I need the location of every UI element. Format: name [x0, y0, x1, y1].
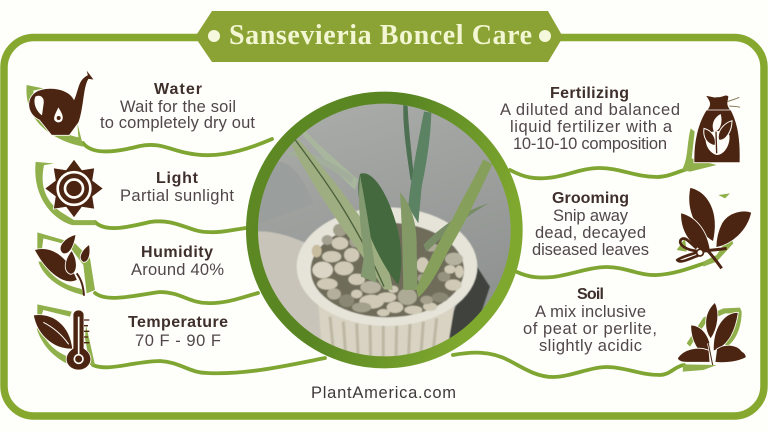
- gravel stones: [312, 224, 464, 316]
- text: fertilizing: Fertilizing: [550, 85, 629, 102]
- text: fertilizing: A diluted and balanced: [500, 101, 680, 119]
- icon: grooming leaves and scissors: [677, 187, 752, 268]
- text: water: Water: [154, 81, 202, 98]
- icon: temperature leaf and thermometer: [33, 304, 95, 370]
- text: soil: [523, 286, 657, 355]
- text: fertilizing: [500, 85, 680, 153]
- title banner: [195, 11, 563, 62]
- text: temperature: 70 F - 90 F: [135, 332, 221, 350]
- text: soil: of peat or perlite,: [523, 320, 657, 338]
- text: grooming: [532, 190, 649, 259]
- text: grooming: diseased leaves: [532, 241, 649, 259]
- connector curves: [83, 139, 705, 377]
- text: temperature: Temperature: [128, 314, 228, 331]
- icon: sun: [35, 159, 103, 225]
- text: soil: Soil: [577, 286, 604, 303]
- text: temperature: [128, 314, 228, 350]
- text: water: [100, 81, 255, 132]
- text: water: to completely dry out: [100, 114, 255, 132]
- icon: soil and sprout: [677, 302, 746, 372]
- icon: fertilizer sack: [682, 95, 740, 172]
- icon: watering can: [26, 69, 94, 147]
- text: water: Wait for the soil: [120, 98, 236, 116]
- text: grooming: dead, decayed: [535, 224, 646, 242]
- text: soil: A mix inclusive: [535, 303, 646, 321]
- photo: potted sansevieria in circle: [252, 98, 520, 367]
- text: humidity: Humidity: [141, 244, 213, 261]
- text: humidity: Around 40%: [131, 261, 224, 279]
- leaves: [287, 105, 492, 297]
- text: grooming: Snip away: [553, 207, 629, 225]
- text: fertilizing: liquid fertilizer with a: [510, 118, 673, 136]
- text: soil: slightly acidic: [539, 337, 642, 355]
- text: light: Light: [156, 170, 199, 187]
- source credit: PlantAmerica.com: [311, 384, 456, 402]
- text: light: Partial sunlight: [120, 187, 234, 205]
- text: light: [120, 170, 234, 205]
- icon: humidity leaves and drops: [34, 232, 95, 296]
- text: grooming: Grooming: [552, 190, 629, 207]
- title banner: Sansevieria Boncel Care: [229, 20, 532, 51]
- text: fertilizing: 10-10-10 composition: [513, 135, 667, 153]
- text: humidity: [131, 244, 224, 279]
